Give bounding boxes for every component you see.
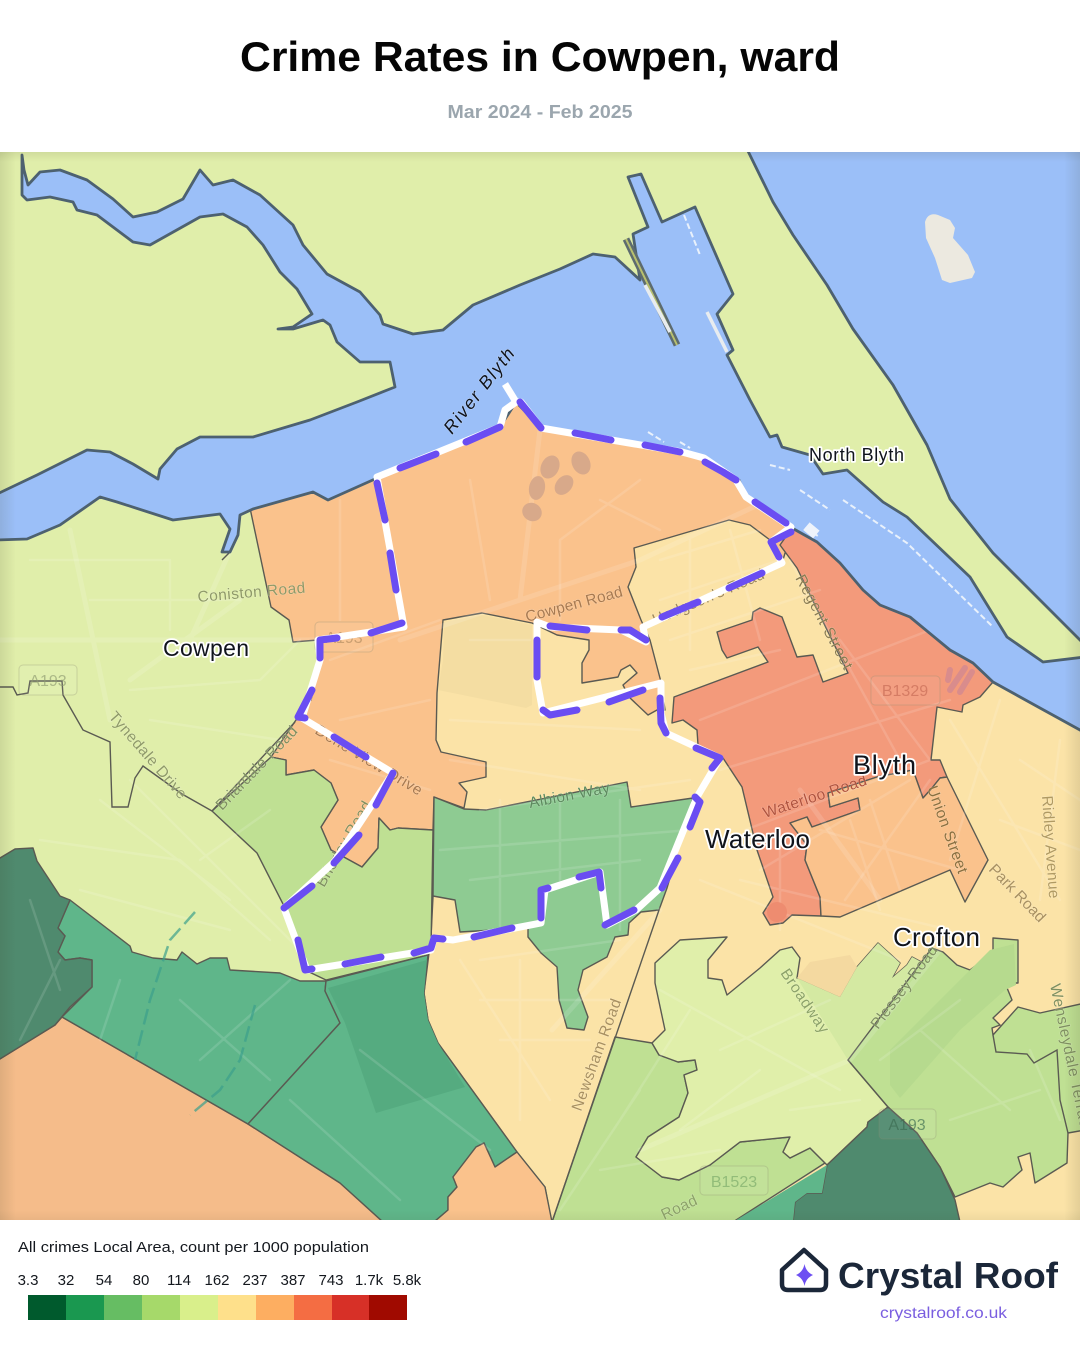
region: Brierley lime-green xyxy=(212,757,433,980)
region: south-east dark green xyxy=(793,1107,960,1222)
street labels: Ridley Avenue xyxy=(1038,795,1062,899)
legend tick values: 162 xyxy=(204,1272,230,1289)
street labels: Park Road xyxy=(985,861,1049,926)
legend xyxy=(18,1239,422,1320)
label: Waterloo: Waterloo xyxy=(705,824,810,854)
region: darker yellow block xyxy=(438,615,532,708)
region: south medium green xyxy=(248,955,517,1222)
region: Blyth red xyxy=(672,528,993,925)
ward outline white xyxy=(284,384,791,970)
street labels: Regent Street xyxy=(791,572,856,673)
harbour jetties xyxy=(648,215,993,627)
legend tick values: 5.8k xyxy=(393,1272,422,1289)
label: North Blyth: North Blyth xyxy=(809,445,904,465)
region: south Blyth orange xyxy=(790,770,988,917)
region: Cowpen Road orange xyxy=(250,402,793,867)
label: Blyth: Blyth xyxy=(853,750,916,780)
street labels: Tynedale Drive xyxy=(105,708,190,803)
legend title: All crimes Local Area, count per 1000 population xyxy=(18,1239,369,1256)
legend tick values: 387 xyxy=(280,1272,306,1289)
region: west medium green xyxy=(58,900,340,1124)
street labels: Waterloo Road xyxy=(761,772,869,822)
street labels: Albion Way xyxy=(528,780,612,812)
roundabout marker xyxy=(767,902,787,922)
street labels: Broadway xyxy=(777,966,832,1037)
region: far-west dark green xyxy=(0,848,92,1062)
dock strips on the Blyth shore xyxy=(948,668,972,692)
region: south orange xyxy=(434,1143,552,1222)
ward dashes purple xyxy=(284,402,791,970)
website link: crystalroof.co.uk xyxy=(880,1305,1008,1322)
shield labels: A193 xyxy=(325,630,363,647)
street labels: Briardale Road xyxy=(213,723,301,814)
street labels xyxy=(105,566,1080,1224)
road shields xyxy=(19,622,940,1195)
dock block xyxy=(803,522,820,538)
region: east lime-green xyxy=(848,938,1080,1197)
pier centre xyxy=(626,239,677,345)
island xyxy=(925,214,975,283)
street labels: Plessey Road xyxy=(868,942,941,1032)
ward boundary xyxy=(284,384,791,970)
shield labels: A193 xyxy=(888,1117,926,1134)
legend tick values: 1.7k xyxy=(355,1272,384,1289)
label: River Blyth: River Blyth xyxy=(439,344,519,437)
region: south-east light lime xyxy=(636,937,932,1180)
shield labels: A193 xyxy=(29,673,67,690)
label: Cowpen: Cowpen xyxy=(163,635,249,661)
legend tick values: 3.3 xyxy=(18,1272,38,1289)
legend tick values: 114 xyxy=(167,1272,191,1289)
region: Plessey wedge xyxy=(797,943,932,1060)
icon: house with star xyxy=(782,1250,826,1290)
legend colour scale xyxy=(28,1295,407,1320)
shield labels xyxy=(29,630,928,1191)
road network xyxy=(0,430,1080,1210)
legend tick values: 32 xyxy=(58,1272,74,1289)
legend tick values: 743 xyxy=(318,1272,344,1289)
legend tick values: 80 xyxy=(133,1272,149,1289)
street labels: Cowpen Road xyxy=(524,584,625,626)
legend tick values: 54 xyxy=(96,1272,112,1289)
sea xyxy=(745,145,1080,650)
river and sea water xyxy=(0,155,1080,733)
subtitle: date range: Mar 2024 - Feb 2025 xyxy=(448,102,632,122)
street labels: Hodgson's Road xyxy=(650,566,767,629)
street labels: Union Street xyxy=(923,784,971,876)
map edge shading xyxy=(0,152,1080,1220)
street labels: Newsham Road xyxy=(569,997,625,1113)
region: bottom-left orange xyxy=(0,1017,383,1222)
street labels: Coniston Road xyxy=(197,580,306,606)
brand logo xyxy=(782,1250,1059,1322)
boundary lines xyxy=(0,552,1068,1222)
shield labels: B1329 xyxy=(882,683,928,700)
region: east darker stripe xyxy=(890,944,1016,1098)
street labels: Road xyxy=(659,1192,700,1224)
street labels: Dene View Drive xyxy=(312,722,425,799)
label: Crofton: Crofton xyxy=(893,922,980,952)
legend tick values: 237 xyxy=(242,1272,268,1289)
ponds beside Cowpen Road xyxy=(522,452,590,522)
region: darker green block xyxy=(328,960,465,1113)
wordmark: Crystal Roof xyxy=(838,1255,1059,1296)
region: south-east lime-green xyxy=(552,1037,825,1222)
street labels: Brierley Road xyxy=(313,798,375,890)
region: teal wedge xyxy=(733,1165,827,1222)
white quay xyxy=(645,285,727,352)
choropleth map xyxy=(0,145,1080,1225)
pier xyxy=(626,239,677,345)
stream in the west green ward xyxy=(135,912,255,1115)
shield labels: B1523 xyxy=(711,1174,757,1191)
region: mid green xyxy=(433,782,693,1030)
region: Crofton tan patch xyxy=(797,955,857,997)
legend tick values xyxy=(18,1272,422,1289)
region: central yellow band xyxy=(424,500,1080,1225)
title: Crime Rates in Cowpen, ward xyxy=(240,33,840,80)
